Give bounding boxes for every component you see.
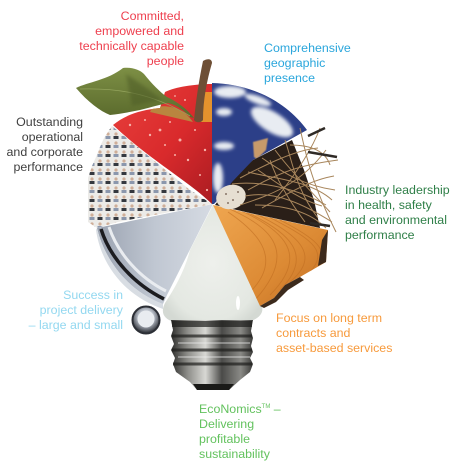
bird nest slice with egg	[213, 128, 338, 232]
label: EcoNomics	[199, 402, 281, 461]
label: operational performance: operational	[22, 130, 83, 144]
label: EcoNomics: sustainability	[199, 447, 270, 461]
earth slice	[212, 83, 307, 204]
apple slice with stem	[113, 59, 212, 204]
label: project delivery: Success in	[63, 288, 123, 302]
leaf	[76, 68, 194, 118]
label: operational performance: Outstanding	[16, 115, 83, 129]
label: geographic presence: geographic	[264, 56, 325, 70]
label: geographic presence	[264, 41, 351, 85]
label: project delivery: – large and small	[29, 318, 123, 332]
label: committed people: empowered and	[95, 24, 184, 38]
label: operational performance: and corporate	[7, 145, 83, 159]
people mosaic slice	[88, 126, 212, 228]
label: long term contracts: contracts and	[276, 326, 350, 340]
label: EcoNomics: profitable	[199, 432, 250, 446]
label: industry leadership: and environmental	[345, 213, 447, 227]
label: project delivery: project delivery	[40, 303, 123, 317]
label: project delivery	[28, 288, 123, 332]
label: EcoNomics: EcoNomicsTM –	[199, 402, 281, 416]
label: committed people: people	[147, 54, 184, 68]
wood slice	[213, 205, 328, 308]
label: operational performance: performance	[13, 160, 83, 174]
label: EcoNomics: Delivering	[199, 417, 254, 431]
infographic: apple, globe, nest, wood, bulb, chrome and people pie	[76, 59, 338, 390]
light bulb	[163, 205, 262, 390]
label: committed people: Committed,	[121, 9, 184, 23]
label: long term contracts: asset-based services	[276, 341, 392, 355]
label: long term contracts	[276, 311, 392, 355]
label: industry leadership	[345, 183, 450, 242]
chrome reflector slice	[96, 204, 213, 309]
label: industry leadership: Industry leadership	[345, 183, 450, 197]
label: committed people	[79, 9, 184, 68]
label: industry leadership: in health, safety	[345, 198, 432, 212]
chrome droplet ring	[132, 306, 160, 334]
label: long term contracts: Focus on long term	[276, 311, 382, 325]
label: operational performance	[7, 115, 83, 174]
label: geographic presence: presence	[264, 71, 315, 85]
apple stem	[194, 59, 212, 122]
label: committed people: technically capable	[79, 39, 184, 53]
bulb screw base	[171, 320, 253, 390]
label: industry leadership: performance	[345, 228, 415, 242]
label: geographic presence: Comprehensive	[264, 41, 351, 55]
